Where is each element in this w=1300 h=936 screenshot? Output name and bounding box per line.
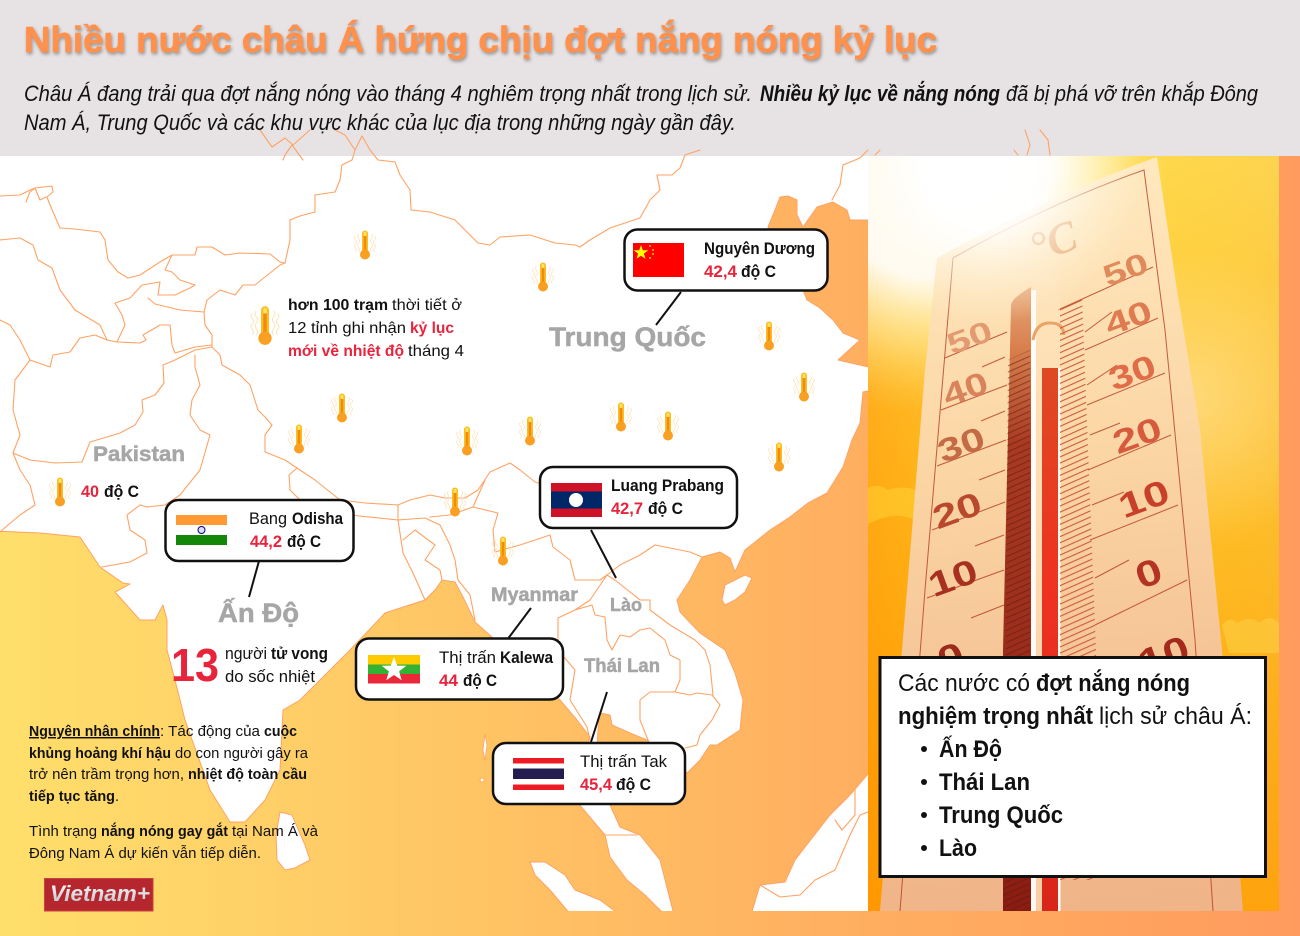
land: Hainan [722, 575, 752, 605]
icon: thermometer [520, 416, 540, 446]
photo: left scale numbers [930, 322, 990, 656]
connector: Nguyên Dương [656, 292, 681, 325]
text block: weather stations: mới về nhiệt độ [288, 343, 404, 360]
callout: Luang Prabang, Laos: Luang Prabang [611, 477, 724, 495]
photo: left scale numbers: 0 [932, 633, 970, 681]
flag: Thailand [513, 758, 564, 790]
photo: right scale numbers: 20 [1108, 411, 1167, 462]
callout: Tak, Thailand: độ C [616, 776, 651, 794]
callout: Nguyên Dương, China: Nguyên Dương [704, 240, 815, 258]
text block: main causes: cuộc [264, 724, 297, 740]
text block: main causes: khủng hoảng khí hậu [29, 746, 171, 762]
header band [0, 0, 1300, 156]
connector: Tak [591, 692, 607, 742]
photo: right scale numbers [1104, 254, 1188, 656]
callout: Tak, Thailand: Thị trấn Tak [580, 753, 668, 771]
photo: board frame line [900, 170, 1213, 911]
callout: Pakistan 40 độ C: độ C [104, 482, 139, 501]
callout: countries with worst heat waves: nghiệm trọng nhất [898, 703, 1093, 730]
photo: sun wash over board [934, 156, 1139, 316]
land: Andaman islands [480, 734, 487, 782]
callout: Kalewa, Myanmar: độ C [463, 672, 497, 690]
callout: countries with worst heat waves: Trung Quốc [939, 802, 1063, 829]
callout: Bang Odisha, India: độ C [287, 533, 321, 551]
panel: map of Asia [0, 150, 873, 915]
icon: thermometer [532, 262, 554, 292]
text block: main causes: Tình trạng [29, 824, 97, 840]
callout: Luang Prabang, Laos: 42,7 [611, 500, 643, 518]
stat: 13 deaths from heat stroke: tử vong [271, 645, 328, 663]
stat: 13 deaths from heat stroke [171, 639, 328, 691]
text block: main causes: tiếp tục tăng [29, 789, 115, 805]
photo: hot sky [868, 156, 1279, 911]
connector: Kalewa [507, 608, 531, 640]
photo: right scale numbers: 10 [1113, 472, 1175, 526]
photo: left scale numbers: 30 [933, 420, 990, 470]
text block: main causes: Nguyên nhân chính [29, 724, 160, 740]
callout: Kalewa, Myanmar: Kalewa [500, 649, 554, 667]
text block: main causes: nhiệt độ toàn cầu [188, 767, 307, 783]
connector: Bang Odisha [249, 561, 259, 597]
text block: weather stations: kỷ lục [410, 320, 454, 337]
callout: countries with worst heat waves: Ấn Độ [939, 735, 1002, 763]
callout: Luang Prabang, Laos: độ C [648, 500, 683, 518]
callout: countries with worst heat waves: lịch sử châu Á: [1099, 703, 1252, 730]
callout: countries with worst heat waves: Thái Lan [939, 769, 1030, 796]
photo: right scale numbers: 40 [1100, 293, 1157, 342]
flag: Myanmar [368, 655, 420, 684]
intro text: Châu Á đang trải qua đợt nắng nóng vào tháng 4 nghiêm trọng nhất trong lịch sử. [24, 81, 752, 106]
flag: India [176, 515, 227, 545]
icon: large thermometer [251, 306, 279, 345]
photo: scale lines [927, 267, 1187, 625]
callout: countries with worst heat waves: Các nước có [898, 670, 1030, 697]
icon: thermometer [492, 536, 514, 566]
text block: weather stations: 12 tỉnh ghi nhận [288, 320, 406, 337]
callout: countries with worst heat waves [880, 658, 1266, 876]
photo: glass tube [1036, 275, 1060, 911]
photo: right scale numbers: 0 [1130, 549, 1168, 597]
bottom band [0, 911, 1300, 936]
country borders [0, 130, 868, 897]
logo: Vietnam+ [44, 878, 153, 911]
text block: main causes: : Tác động của [160, 724, 261, 740]
callout: Nguyên Dương, China: 42,4 [704, 263, 738, 281]
photo: tick marks [1060, 296, 1096, 650]
label: Thái Lan: Thái Lan [584, 656, 660, 677]
text block: main causes [29, 724, 319, 862]
header map overflow lines [875, 130, 1050, 155]
callout: Kalewa, Myanmar [356, 638, 563, 700]
photo: left scale numbers: 10 [923, 552, 983, 605]
callout: Pakistan 40 độ C [81, 482, 139, 501]
text block: weather stations: tháng 4 [408, 343, 464, 360]
connector: Luang Prabang [591, 530, 616, 578]
callout: Bang Odisha, India: Bang [249, 510, 287, 528]
icon: thermometer [354, 230, 376, 260]
flag: China [633, 243, 684, 277]
callout: Bang Odisha, India: Odisha [292, 510, 344, 528]
stat: 13 deaths from heat stroke: 13 [171, 639, 219, 691]
icon: thermometer [658, 412, 678, 440]
land: mainland Asia [0, 150, 873, 915]
label: Pakistan: Pakistan [93, 443, 185, 466]
intro text [24, 81, 1259, 135]
icon: thermometer [444, 488, 466, 516]
photo: left scale numbers: 40 [938, 365, 993, 413]
intro text: Nam Á, Trung Quốc và các khu vực khác của lục địa trong những ngày gần đây. [24, 110, 736, 135]
text block: weather stations: thời tiết ở [392, 297, 463, 314]
title: Nhiều nước châu Á hứng chịu đợt nắng nóng kỷ lục [24, 18, 937, 60]
photo: left scale numbers: 20 [928, 486, 987, 537]
photo: wooden thermometer board [880, 157, 1243, 911]
icon: thermometer [288, 424, 310, 454]
text block: main causes: trở nên trầm trọng hơn, [29, 767, 184, 783]
land: Sumatra [530, 862, 620, 915]
land: Borneo [751, 768, 873, 915]
text block: main causes: Đông Nam Á dự kiến vẫn tiếp diễn. [29, 845, 261, 862]
text block: main causes: nắng nóng gay gắt [101, 822, 228, 840]
photo: degree symbol: °C [1023, 210, 1084, 273]
text block: main causes: . [115, 789, 119, 805]
text block: main causes: tại Nam Á và [232, 823, 319, 840]
intro text: Nhiều kỷ lục về nắng nóng [760, 81, 1000, 106]
photo: left scale numbers: 50 [942, 314, 997, 361]
text block: main causes: do con người gây ra [175, 746, 309, 762]
icon: thermometer [768, 442, 790, 472]
photo: red fluid [1042, 368, 1058, 911]
callout: countries with worst heat waves: đợt nắng nóng [1036, 669, 1190, 697]
callout: Pakistan 40 độ C: 40 [81, 482, 99, 501]
text block: weather stations [288, 297, 464, 360]
photo: clouds [868, 486, 915, 524]
photo: shadow of tube [1003, 287, 1031, 911]
callout: Tak, Thailand: 45,4 [580, 776, 613, 794]
callout: countries with worst heat waves: Lào [939, 835, 977, 862]
callout: Kalewa, Myanmar: Thị trấn [439, 649, 496, 667]
icon: thermometer [794, 372, 814, 402]
photo: sun glow [868, 156, 1149, 402]
panel: thermometer photo [868, 156, 1279, 911]
flag: Laos [551, 483, 602, 517]
callout: Tak, Thailand [493, 743, 685, 804]
photo: right scale numbers: 30 [1104, 348, 1161, 398]
label: Myanmar: Myanmar [491, 585, 579, 606]
label: Trung Quốc: Trung Quốc [549, 322, 706, 352]
land: Sri Lanka [276, 812, 310, 870]
callout: Nguyên Dương, China: độ C [741, 263, 776, 281]
icon: thermometer [332, 394, 352, 422]
icon: thermometer [50, 478, 70, 506]
callout: Kalewa, Myanmar: 44 [439, 672, 459, 690]
stat: 13 deaths from heat stroke: người [225, 645, 267, 663]
label: Ấn Độ: Ấn Độ [218, 597, 299, 628]
text block: weather stations: hơn 100 trạm [288, 297, 388, 314]
logo: Vietnam+: Vietnam+ [50, 881, 150, 906]
intro text: đã bị phá vỡ trên khắp Đông [1006, 81, 1259, 106]
callout: Nguyên Dương, China [624, 230, 828, 290]
callout: Bang Odisha, India [166, 500, 354, 561]
label: Lào: Lào [610, 595, 642, 615]
icon: thermometer [610, 402, 632, 432]
icon: thermometer [758, 322, 780, 350]
stat: 13 deaths from heat stroke: do sốc nhiệt [225, 668, 315, 686]
icon: thermometer [456, 426, 478, 456]
callout: Luang Prabang, Laos [540, 467, 737, 528]
callout: Bang Odisha, India: 44,2 [250, 533, 282, 551]
photo: right scale numbers: 10 [1133, 627, 1195, 683]
photo: right scale numbers: 50 [1098, 246, 1153, 293]
